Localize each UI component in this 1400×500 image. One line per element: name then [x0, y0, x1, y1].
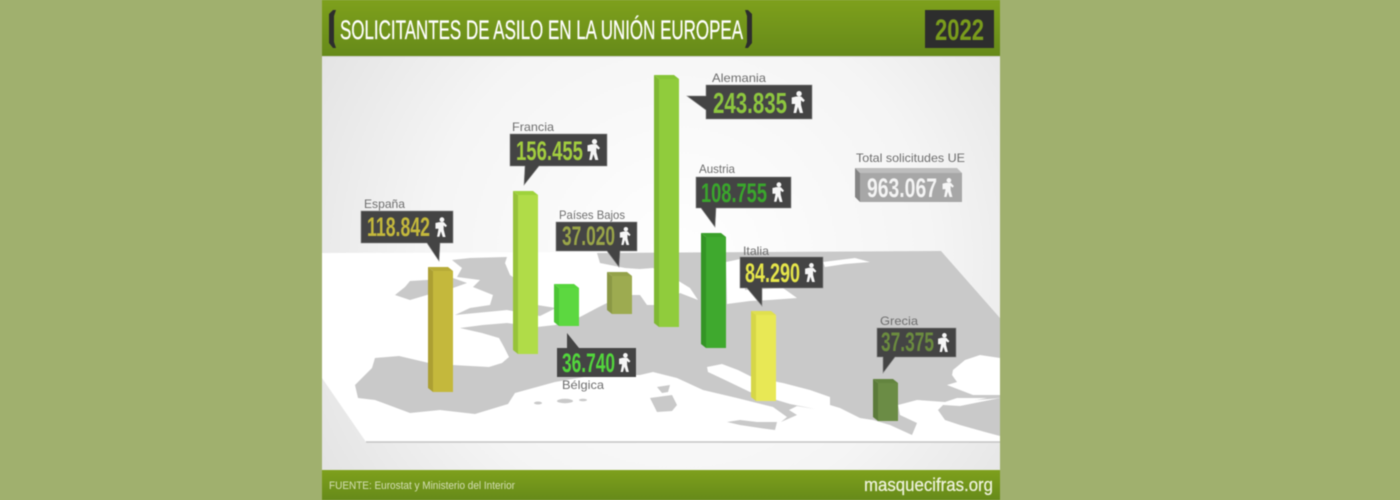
bar: Países Bajos [607, 272, 632, 314]
label: Grecia [880, 314, 918, 328]
header band [322, 0, 1000, 57]
panel background [322, 56, 1000, 470]
land: Sardinia [650, 395, 677, 412]
value: 36.740 [562, 348, 615, 378]
icon: walker [619, 353, 630, 373]
land: Corsica [657, 385, 670, 393]
sea: Gulf of Finland [726, 258, 797, 304]
icon: walker [938, 333, 949, 353]
icon: walker [620, 227, 631, 246]
callout: Grecia [877, 314, 956, 373]
label: Bélgica [562, 378, 604, 392]
value box [687, 85, 812, 119]
icon: walker [805, 263, 816, 283]
icon: walker [943, 178, 954, 198]
value: 108.755 [701, 178, 767, 208]
icon: walker [588, 139, 600, 161]
3D box [855, 168, 962, 202]
total solicitudes [855, 151, 965, 203]
title right bracket [745, 10, 752, 48]
sea: north sliver [823, 258, 870, 267]
label: España [364, 197, 405, 211]
bar: Bélgica [554, 284, 579, 326]
value box [361, 211, 453, 261]
value box [740, 257, 823, 306]
value box [557, 333, 636, 377]
label: Alemania [712, 71, 766, 85]
land: Sicily [727, 420, 777, 430]
label: Italia [743, 244, 769, 258]
sea: Black Sea [947, 355, 1000, 395]
year box [925, 10, 994, 48]
website: masquecifras.org [864, 475, 993, 495]
value: 243.835 [713, 88, 787, 120]
panel: infographic [322, 0, 1000, 500]
land: Balearic islands [534, 399, 587, 404]
value: 156.455 [516, 136, 583, 166]
land: Great Britain [452, 257, 556, 316]
value: 963.067 [867, 173, 937, 203]
value box [877, 328, 956, 373]
value box [556, 222, 637, 267]
bar: España [428, 267, 453, 392]
title left bracket [329, 10, 336, 48]
value box [696, 177, 791, 227]
value: 118.842 [367, 212, 430, 242]
label: Austria [699, 162, 735, 176]
footer band [322, 470, 1000, 500]
value: 84.290 [745, 258, 800, 288]
bar: Francia [513, 191, 538, 354]
bar: Grecia [873, 379, 898, 421]
bar: Austria [701, 233, 726, 348]
callout: España [361, 197, 453, 261]
land: Turkey [938, 398, 1000, 436]
label: Países Bajos [559, 208, 625, 222]
callout: Francia [510, 120, 607, 185]
source note: FUENTE: Eurostat y Ministerio del Interior [329, 480, 515, 492]
value: 37.020 [562, 221, 615, 251]
label: Total solicitudes UE [856, 151, 965, 165]
icon: walker [792, 91, 805, 114]
bar: Italia [751, 311, 776, 401]
year: 2022 [935, 14, 984, 47]
callout: Italia [740, 244, 823, 306]
callout: Alemania [687, 71, 812, 120]
callout: Austria [696, 162, 791, 227]
callout: Países Bajos [556, 208, 637, 267]
value: 37.375 [881, 327, 934, 357]
title: SOLICITANTES DE ASILO EN LA UNIÓN EUROPEA [340, 14, 743, 45]
bar: Alemania [654, 75, 679, 327]
icon: walker [772, 182, 784, 203]
label: Francia [512, 120, 554, 134]
land: continent [355, 251, 1000, 435]
callout: Bélgica [557, 333, 636, 392]
icon: walker [435, 217, 447, 238]
land: Ireland [395, 278, 467, 300]
sea: Marmara strip [917, 398, 987, 405]
map plate [322, 251, 1000, 442]
value box [510, 134, 607, 185]
map of Europe [322, 251, 1000, 442]
